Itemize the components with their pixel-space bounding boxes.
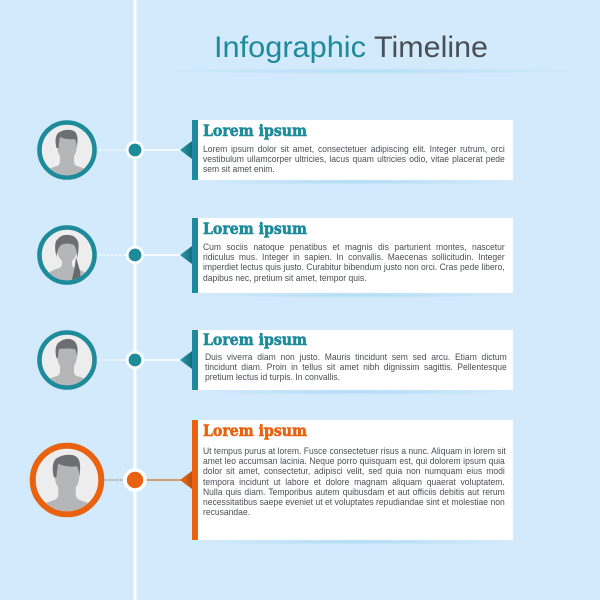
text block 3: tincidunt diam. Proin in tellus sit amet nibh dignissim sagittis. Pellentesque: [205, 362, 507, 372]
pointer 2: [180, 246, 192, 264]
text block 2: imperdiet lectus quis justo. Curabitur bibendum justo non orci. Cras pede libero,: [203, 262, 505, 272]
avatar 3: [40, 332, 94, 388]
timeline dot 2: [126, 246, 144, 264]
text block 1: vestibulum ullamcorper ultricies, lacus quam ultricies odio, vitae placerat pede: [203, 154, 505, 164]
text block 2: dapibus nec, pretium sit amet, tempor quis.: [203, 273, 367, 283]
text block 2: [203, 242, 505, 283]
text block 4: Nulla quis diam. Temporibus autem quibusdam et aut officiis debitis aut rerum: [203, 487, 505, 497]
panel: card 4: [192, 420, 513, 540]
text block 3: pretium lectus id turpis. In convallis.: [205, 372, 340, 382]
card 4 shadow: [200, 539, 513, 545]
text block 2: ridiculus mus. Integer in sapien. In convallis. Maecenas sollicitudin. Integer: [203, 252, 505, 262]
text block 1: Lorem ipsum dolor sit amet, consectetuer adipiscing elit. Integer rutrum, orci: [203, 144, 505, 154]
text block 1: [203, 144, 505, 174]
text block 4: amet leo accumsan lacinia. Neque porro quisquam est, qui dolorem ipsum quia: [203, 456, 505, 466]
heading 1: Lorem ipsum: [203, 121, 307, 140]
text block 4: recusandae.: [203, 507, 250, 517]
heading 2: Lorem ipsum: [203, 219, 307, 238]
text block 3: [205, 352, 507, 382]
panel: card 3: [192, 330, 513, 390]
connectors row 4: [105, 479, 182, 481]
pointer 3: [180, 351, 192, 369]
text block 4: [203, 446, 506, 517]
text block 3: Duis viverra diam non justo. Mauris tincidunt sem sed arcu. Etiam dictum: [205, 352, 507, 362]
text block 2: Cum sociis natoque penatibus et magnis dis parturient montes, nascetur: [203, 242, 505, 252]
text block 4: dolor sit amet, consectetur, adipisci velit, sed quia non numquam eius modi: [203, 466, 505, 476]
card 1 shadow: [200, 179, 513, 185]
avatar 1: [40, 122, 94, 178]
connectors row 1: [99, 149, 182, 151]
card 2 shadow: [200, 292, 513, 298]
avatar 4: [33, 446, 101, 515]
panel: card 2: [192, 218, 513, 293]
heading 3: Lorem ipsum: [203, 330, 307, 349]
heading 4: Lorem ipsum: [203, 421, 307, 440]
timeline dot 4: [123, 468, 147, 492]
panel: card 1: [192, 120, 513, 180]
text block 4: Ut tempus purus at lorem. Fusce consectetuer risus a nunc. Aliquam in lorem sit: [203, 446, 506, 456]
timeline and connectors: [30, 0, 192, 600]
title: Infographic: [214, 31, 366, 64]
timeline dot 1: [126, 141, 144, 159]
connectors row 2: [99, 254, 182, 256]
title: Timeline: [374, 31, 488, 64]
text block 4: tempora incidunt ut labore et dolore magnam aliquam quaerat voluptatem.: [203, 477, 505, 487]
text block 4: necessitatibus saepe eveniet ut et voluptates repudiandae sint et molestiae non: [203, 497, 505, 507]
avatar 2: [40, 228, 94, 283]
text block 1: sem sit amet enim.: [203, 164, 275, 174]
vertical timeline line: [134, 0, 136, 600]
connectors row 3: [99, 359, 182, 361]
card 3 shadow: [200, 389, 513, 395]
timeline dot 3: [126, 351, 144, 369]
pointer 1: [180, 141, 192, 159]
pointer 4: [180, 471, 192, 489]
title: [214, 31, 488, 64]
